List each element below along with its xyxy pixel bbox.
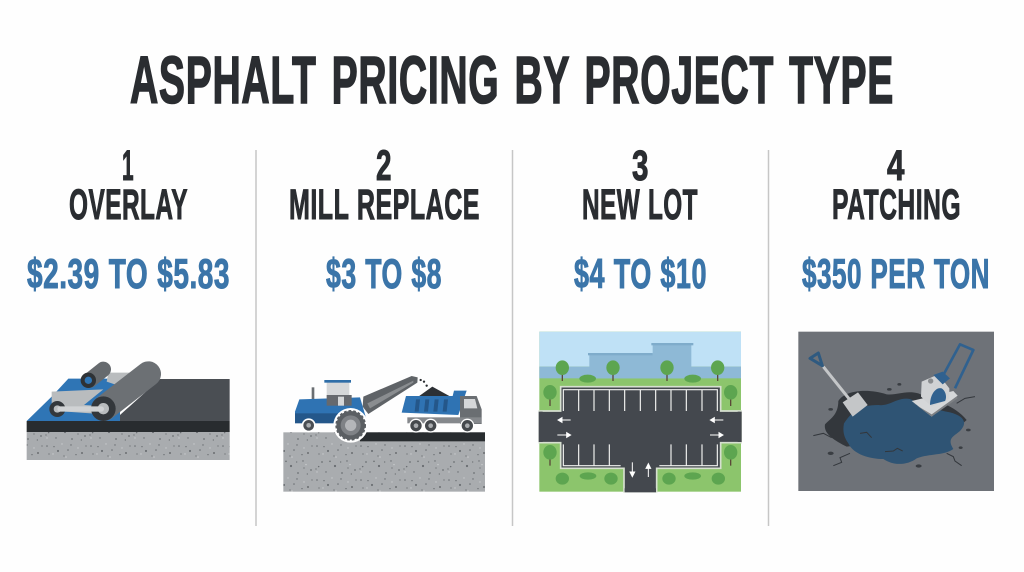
price: mill replace: $3 TO $8	[326, 250, 442, 297]
heading: overlay: OVERLAY	[69, 181, 188, 229]
panel: mill replace	[283, 142, 485, 492]
heading: mill replace: MILL REPLACE	[289, 181, 480, 229]
icon: paving rollers on asphalt layers	[27, 369, 230, 460]
price: new lot: $4 TO $10	[574, 250, 707, 297]
compactor	[943, 344, 973, 388]
number 3: 3	[632, 142, 649, 190]
icon: milling machine and dump truck	[283, 376, 485, 492]
price: overlay: $2.39 TO $5.83	[27, 250, 230, 297]
heading: new lot: NEW LOT	[582, 181, 698, 229]
shovel	[823, 367, 850, 400]
truck	[418, 387, 449, 397]
parking lines	[563, 390, 717, 466]
cracks	[813, 397, 975, 466]
icon: pothole with shovel and compactor	[798, 332, 994, 491]
trees	[550, 368, 731, 466]
conveyor	[363, 376, 418, 414]
lane arrows	[557, 418, 723, 477]
panel: overlay: 1	[122, 142, 134, 190]
patch	[843, 399, 964, 464]
pothole	[825, 391, 967, 447]
panel: patching	[798, 142, 994, 491]
panel: new lot	[539, 142, 742, 492]
number 4: 4	[887, 142, 905, 190]
panel: overlay	[27, 142, 230, 460]
tractor	[327, 382, 349, 398]
icon: parking lot plan	[539, 332, 742, 492]
number 2: 2	[376, 142, 392, 190]
asphalt	[539, 387, 741, 492]
